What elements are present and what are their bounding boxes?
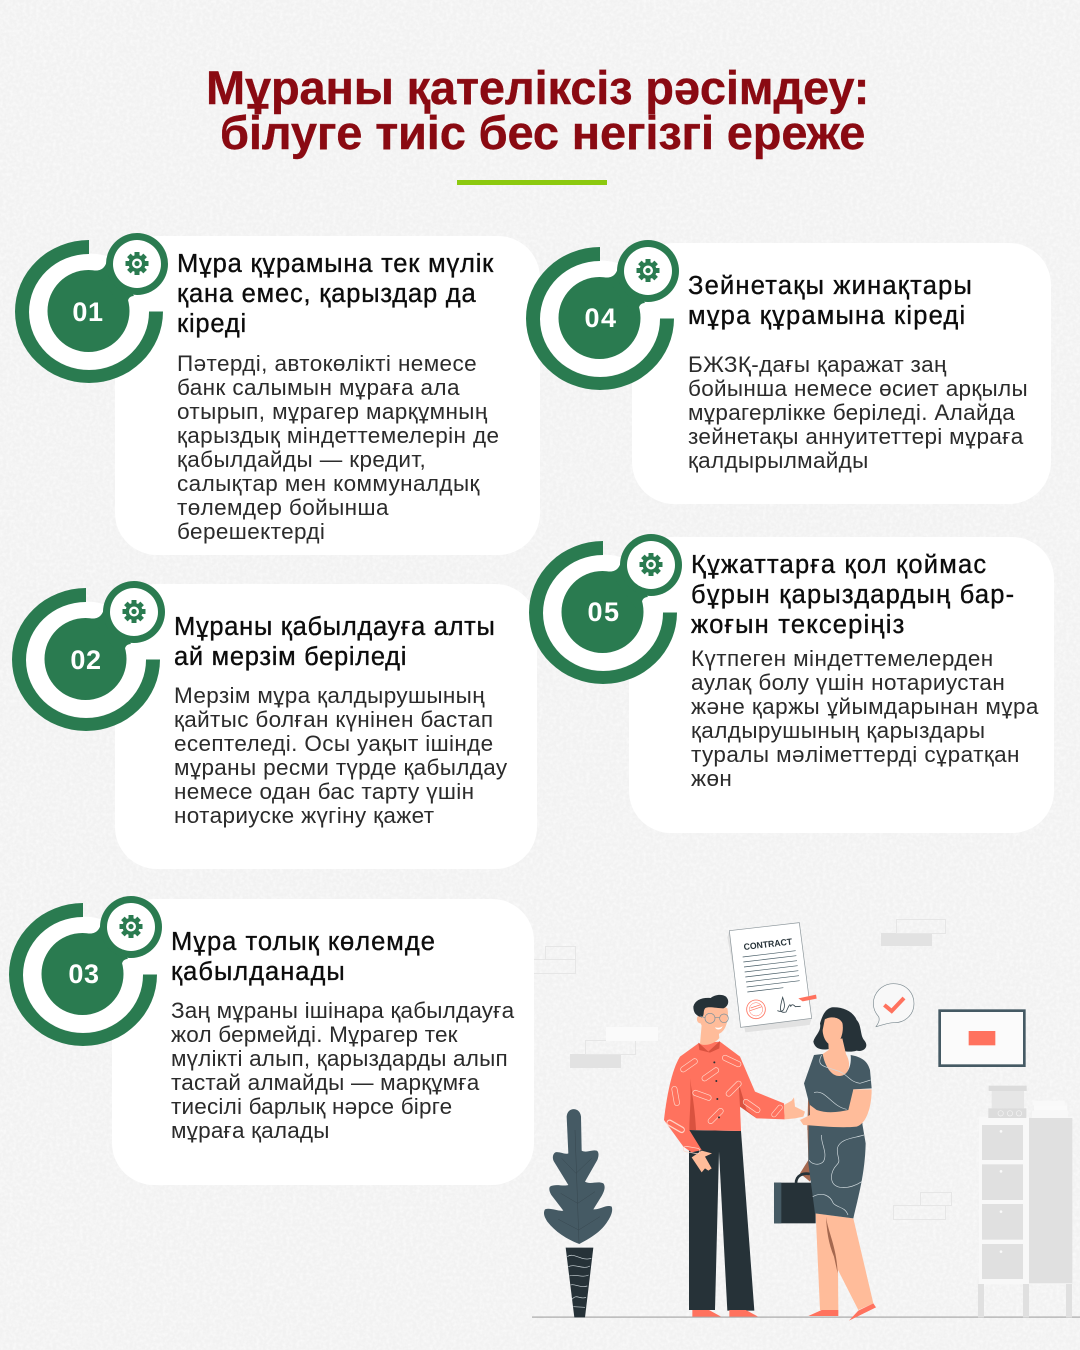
badge 02 <box>12 581 165 731</box>
briefcase <box>774 1174 816 1223</box>
text: rule 02: есептеледі. Осы уақыт ішінде <box>174 731 494 756</box>
heading: rule 02: ай мерзім беріледі <box>174 643 407 671</box>
badge 04 <box>526 240 679 390</box>
accent underline <box>457 180 607 185</box>
heading: rule 03: қабылданады <box>171 958 346 986</box>
text: rule 02: қайтыс болған күнінен бастап <box>174 707 493 732</box>
panel: rule 05 <box>629 537 1054 833</box>
cabinet <box>978 1086 1072 1317</box>
contract document: CONTRACT <box>743 936 793 952</box>
text: rule 01: төлемдер бойынша <box>177 495 389 520</box>
text: rule 03: жол бермейді. Мұрагер тек <box>171 1022 458 1047</box>
heading: rule 05: жоғын тексеріңіз <box>691 611 905 639</box>
panel: rule 04 <box>632 243 1051 504</box>
panel: rule 02 <box>115 584 537 869</box>
text: rule 02 <box>174 683 508 828</box>
text: rule 05: Күтпеген міндеттемелерден <box>691 646 994 671</box>
heading: rule 05: Құжаттарға қол қоймас <box>691 551 987 579</box>
text: rule 04 <box>688 352 1028 473</box>
text: rule 02: мұраны ресми түрде қабылдау <box>174 755 508 780</box>
badge 05: 05 <box>587 597 621 627</box>
text: rule 03: тиесілі барлық нәрсе бірге <box>171 1094 452 1119</box>
text: rule 05: жөн <box>691 766 732 791</box>
text: rule 01 <box>177 351 499 544</box>
heading: rule 03 <box>171 928 436 986</box>
man <box>664 995 805 1152</box>
text: rule 01: Пәтерді, автокөлікті немесе <box>177 351 477 376</box>
text: rule 04: мұрагерлікке беріледі. Алайда <box>688 400 1015 425</box>
heading: rule 02 <box>174 613 496 671</box>
contract document <box>727 923 817 1032</box>
text: rule 01: қабылдайды — кредит, <box>177 447 426 472</box>
woman's legs <box>816 1213 873 1310</box>
badge 01: 01 <box>72 297 104 327</box>
heading: rule 05: бұрын қарыздардың бар- <box>691 581 1015 609</box>
woman's lower arm and hand <box>800 1123 818 1182</box>
woman's shoes <box>808 1303 876 1321</box>
text: rule 01: қарыздық міндеттемелерін де <box>177 423 499 448</box>
heading: rule 02: Мұраны қабылдауға алты <box>174 613 496 641</box>
ground line <box>532 1316 1080 1318</box>
text: rule 02: нотариуске жүгіну қажет <box>174 803 434 828</box>
sleeve prints <box>666 1120 700 1154</box>
text: rule 03 <box>171 998 514 1143</box>
woman's skirt <box>808 1120 866 1218</box>
text: rule 05: қалдырушының қарыздары <box>691 718 985 743</box>
woman <box>800 1007 872 1127</box>
icon: wall picture <box>940 1011 1024 1066</box>
furniture and wall picture <box>940 1011 1072 1317</box>
text: rule 04: қалдырылмайды <box>688 448 869 473</box>
heading: rule 04 <box>688 272 973 330</box>
heading: rule 01: қана емес, қарыздар да <box>177 280 476 308</box>
woman's back arm <box>807 1088 820 1130</box>
heading: rule 01: кіреді <box>177 310 247 338</box>
text: rule 03: тастай алмайды — марқұмға <box>171 1070 479 1095</box>
text: rule 02: Мерзім мұра қалдырушының <box>174 683 485 708</box>
panel: rule 03 <box>112 899 534 1185</box>
text: rule 03: мүлікті алып, қарыздарды алып <box>171 1046 508 1071</box>
text: rule 05: аулақ болу үшін нотариустан <box>691 670 1005 695</box>
text: rule 05 <box>691 646 1039 791</box>
text: rule 01: берешектерді <box>177 519 325 544</box>
heading: rule 04: Зейнетақы жинақтары <box>688 272 973 300</box>
title: Мұраны қателіксіз рәсімдеу: <box>206 61 869 114</box>
man's shoes <box>692 1310 758 1317</box>
text: rule 05: туралы мәліметтерді сұратқан <box>691 742 1020 767</box>
text: rule 01: банк салымын мұраға ала <box>177 375 460 400</box>
text: rule 04: бойынша немесе өсиет арқылы <box>688 376 1028 401</box>
man's lower hand <box>692 1151 712 1172</box>
text: rule 05: және қаржы ұйымдарынан мұра <box>691 694 1039 719</box>
speech bubble with check mark <box>873 984 914 1027</box>
plant <box>544 1109 612 1317</box>
contract, speech bubble and upper bodies <box>727 923 914 1130</box>
heading: rule 01 <box>177 250 494 338</box>
panel: rule 01 <box>115 236 540 555</box>
badge 01 <box>15 233 168 383</box>
text: rule 01: салықтар мен коммуналдық <box>177 471 480 496</box>
heading: rule 03: Мұра толық көлемде <box>171 928 436 956</box>
text: rule 04: зейнетақы аннуитеттері мұраға <box>688 424 1024 449</box>
badge 02: 02 <box>70 645 102 675</box>
text: rule 03: Заң мұраны ішінара қабылдауға <box>171 998 514 1023</box>
text: rule 01: отырып, мұрагер марқұмның <box>177 399 488 424</box>
badge 04: 04 <box>584 303 618 333</box>
badge 05 <box>529 534 682 684</box>
text: rule 03: мұраға қалады <box>171 1118 330 1143</box>
title <box>206 61 869 160</box>
man's trousers <box>689 1130 754 1311</box>
badge 03: 03 <box>68 959 100 989</box>
badge 03 <box>9 896 162 1046</box>
text: rule 02: немесе одан бас тарту үшін <box>174 779 474 804</box>
text: rule 04: БЖЗҚ-дағы қаражат заң <box>688 352 947 377</box>
title: білуге тиіс бес негізгі ереже <box>220 106 865 159</box>
heading: rule 05 <box>690 551 1015 639</box>
heading: rule 01: Мұра құрамына тек мүлік <box>177 250 494 278</box>
heading: rule 04: мұра құрамына кіреді <box>688 302 966 330</box>
